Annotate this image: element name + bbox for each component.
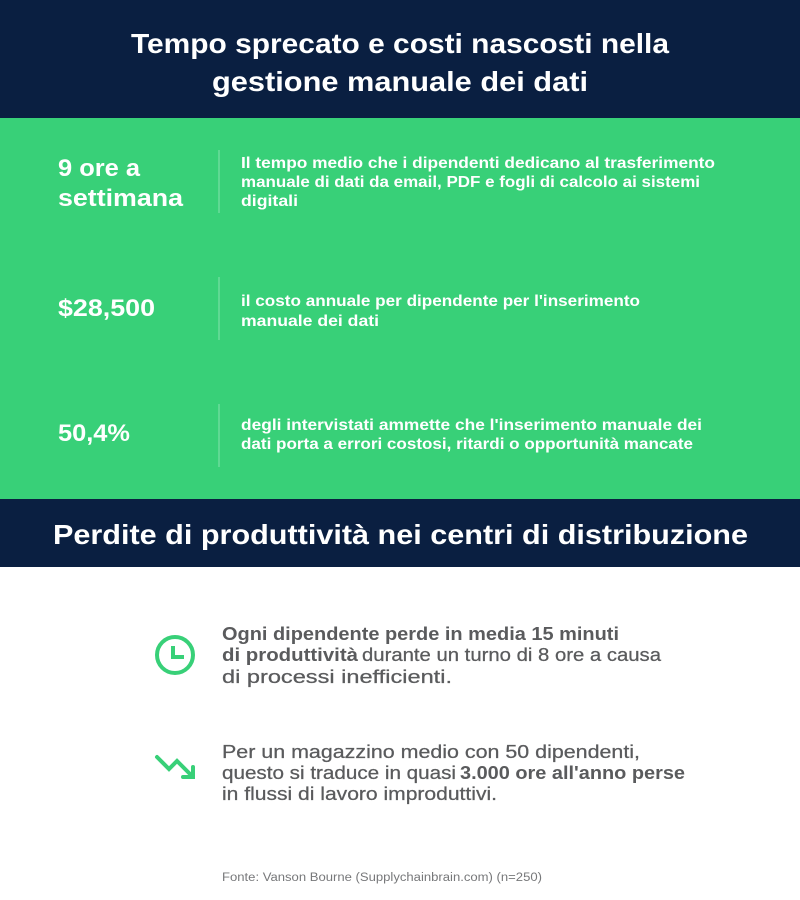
stat: 50,4%: degli intervistati ammette che l'inserimento manuale dei	[241, 417, 702, 434]
icon: clock	[157, 637, 193, 673]
stat: 9 ore a settimana: manuale di dati da email, PDF e fogli di calcolo ai sistemi	[241, 174, 700, 191]
stat: $28,500: manuale dei dati	[241, 313, 379, 330]
stat: 9 ore a settimana: 9 ore a	[58, 155, 141, 182]
stat: $28,500	[58, 277, 640, 340]
stat: 50,4%	[58, 404, 702, 467]
text block: lost minutes: durante un turno di 8 ore a causa	[362, 645, 662, 665]
panel: key statistics	[0, 118, 800, 499]
stat: 9 ore a settimana: Il tempo medio che i dipendenti dedicano al trasferimento	[241, 155, 715, 172]
text block: annual hours lost: questo si traduce in quasi	[222, 763, 456, 783]
stat: 9 ore a settimana: settimana	[58, 185, 184, 212]
text block: annual hours lost	[222, 742, 685, 804]
panel: title header	[0, 0, 800, 118]
text block: lost minutes: Ogni dipendente perde in media 15 minuti	[222, 624, 619, 644]
stat: 9 ore a settimana: digitali	[241, 193, 298, 210]
icon: downward trend arrow	[157, 757, 193, 777]
title: Tempo sprecato e costi nascosti nella	[131, 28, 669, 59]
stat: 50,4%: 50,4%	[58, 420, 130, 447]
heading: Perdite di produttività nei centri di distribuzione	[53, 519, 748, 550]
text block: annual hours lost: in flussi di lavoro improduttivi.	[222, 784, 497, 804]
text block: lost minutes: di produttività	[222, 645, 359, 665]
stat: $28,500: $28,500	[58, 295, 155, 322]
stat: 9 ore a settimana	[58, 150, 715, 213]
source note: Fonte: Vanson Bourne (Supplychainbrain.com) (n=250)	[222, 872, 542, 884]
text block: annual hours lost: 3.000 ore all'anno perse	[460, 763, 685, 783]
panel: section heading	[0, 499, 800, 567]
text block: annual hours lost: Per un magazzino medio con 50 dipendenti,	[222, 742, 640, 762]
text block: lost minutes	[222, 624, 662, 687]
stat: 50,4%: dati porta a errori costosi, ritardi o opportunità mancate	[241, 436, 693, 453]
text block: lost minutes: di processi inefficienti.	[222, 667, 452, 687]
title: gestione manuale dei dati	[212, 66, 588, 97]
stat: $28,500: il costo annuale per dipendente per l'inserimento	[241, 293, 640, 310]
title	[131, 28, 669, 97]
